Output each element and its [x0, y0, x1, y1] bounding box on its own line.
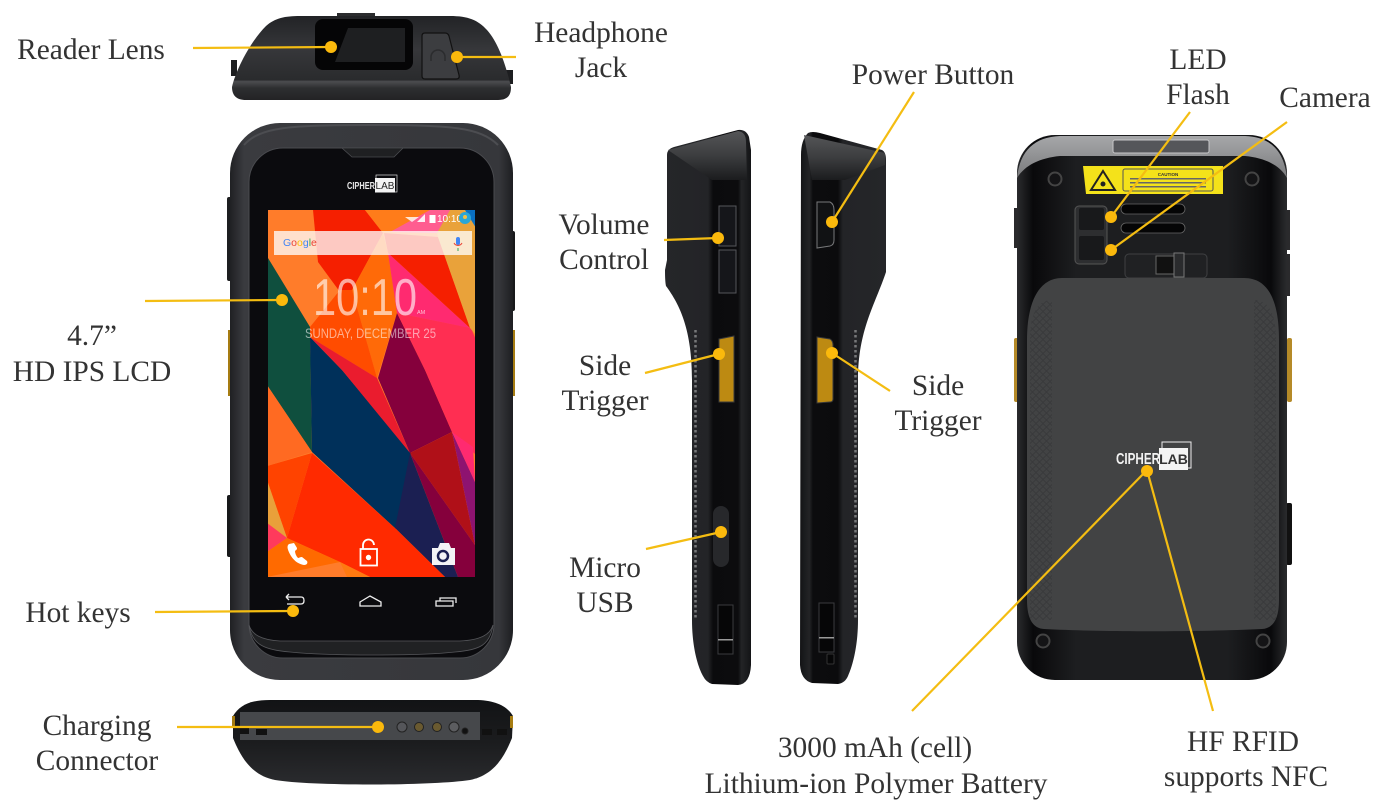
callout: Side Trigger left: Side [579, 350, 631, 382]
logo: CipherLab: LAB [376, 181, 395, 192]
status bar [405, 212, 471, 225]
screen: wallpaper [267, 210, 476, 577]
power button [817, 202, 834, 248]
headphone jack cover [422, 33, 459, 79]
device: front view [227, 123, 515, 680]
status bar: 10:10 [437, 214, 462, 225]
callout: Volume Control [559, 209, 724, 276]
callout: Reader Lens [17, 34, 337, 66]
side trigger [817, 337, 833, 403]
callout: battery: Lithium-ion Polymer Battery [705, 768, 1048, 800]
battery cover [1027, 278, 1279, 631]
lock screen clock: AM [417, 310, 426, 316]
earpiece speaker [342, 148, 403, 157]
callout: 4.7 inch HD IPS LCD: HD IPS LCD [13, 356, 171, 388]
callout: Power Button: Power Button [852, 59, 1015, 91]
callout: Side Trigger left: Trigger [561, 385, 649, 417]
callout: Headphone Jack: Headphone [534, 17, 668, 49]
search bar [274, 231, 472, 255]
callout: Side Trigger right: Trigger [894, 405, 982, 437]
callout: 4.7 inch HD IPS LCD: 4.7” [67, 320, 117, 352]
screws [1036, 172, 1270, 648]
callout: Power Button [826, 59, 1015, 228]
callout: Headphone Jack: Jack [575, 52, 627, 84]
callout: Volume Control: Control [559, 244, 649, 276]
logo: CipherLab: LAB [1159, 451, 1188, 467]
callout: HF RFID: HF RFID [1187, 726, 1299, 758]
logo: CipherLab [347, 175, 397, 192]
charging pins [397, 722, 468, 734]
flash and camera windows [1075, 206, 1107, 264]
callout: Camera [1105, 82, 1371, 256]
callout: Hot keys [25, 597, 299, 629]
icon: lock [360, 540, 377, 566]
micro USB cover [713, 506, 729, 567]
callout: LED Flash: Flash [1166, 79, 1230, 111]
side buttons [227, 197, 515, 557]
callout: Charging Connector: Charging [43, 710, 152, 742]
side keys [1014, 208, 1292, 565]
reader lens window [315, 19, 413, 70]
callout: Charging Connector [36, 710, 384, 777]
logo: CipherLab: CIPHER [347, 180, 375, 192]
caution label [1083, 166, 1223, 194]
callout: LED Flash: LED [1169, 44, 1227, 76]
callout: Charging Connector: Connector [36, 745, 158, 777]
device: top edge view [231, 13, 513, 100]
scanner window [1113, 140, 1209, 153]
logo: CipherLab [1116, 442, 1191, 470]
device: left side view [665, 130, 751, 685]
callout: Micro USB: Micro [569, 552, 641, 584]
lock screen clock: SUNDAY, DECEMBER 25 [305, 326, 436, 341]
callout: Volume Control: Volume [559, 209, 649, 241]
device: bottom edge view [232, 700, 513, 784]
callout: 4.7 inch HD IPS LCD [13, 294, 288, 388]
callout: Side Trigger right: Side [912, 370, 964, 402]
callout: HF RFID [1141, 465, 1328, 793]
callout: LED Flash [1105, 44, 1230, 223]
silver top band [1017, 136, 1287, 178]
connector slot [718, 605, 733, 654]
connector slot [819, 603, 834, 664]
lock screen clock: 10:10 [313, 269, 417, 327]
callout: Micro USB: USB [576, 587, 634, 619]
speaker slots [1121, 204, 1185, 233]
volume rocker [719, 206, 736, 293]
callout: Hot keys: Hot keys [25, 597, 131, 629]
bottom speaker grille [249, 625, 493, 655]
battery latch [1125, 253, 1207, 278]
callout: Headphone Jack [451, 17, 668, 84]
callout: Micro USB [569, 526, 727, 619]
callout: battery [705, 470, 1147, 800]
callout: battery: 3000 mAh (cell) [778, 732, 972, 764]
callout: Camera: Camera [1279, 82, 1371, 114]
icon: camera [432, 543, 455, 565]
logo: CipherLab: CIPHER [1116, 451, 1160, 468]
caution label: CAUTION [1158, 172, 1178, 177]
callout: HF RFID: supports NFC [1164, 761, 1328, 793]
device: right side view [800, 132, 886, 684]
callout: Reader Lens: Reader Lens [17, 34, 165, 66]
callout: Side Trigger right [826, 347, 982, 437]
search bar: Google [283, 237, 317, 249]
side trigger [719, 336, 734, 402]
icon: phone [288, 543, 307, 565]
device: back view [1014, 135, 1292, 680]
callout: Side Trigger left [561, 348, 725, 417]
hot key icons [286, 594, 456, 606]
